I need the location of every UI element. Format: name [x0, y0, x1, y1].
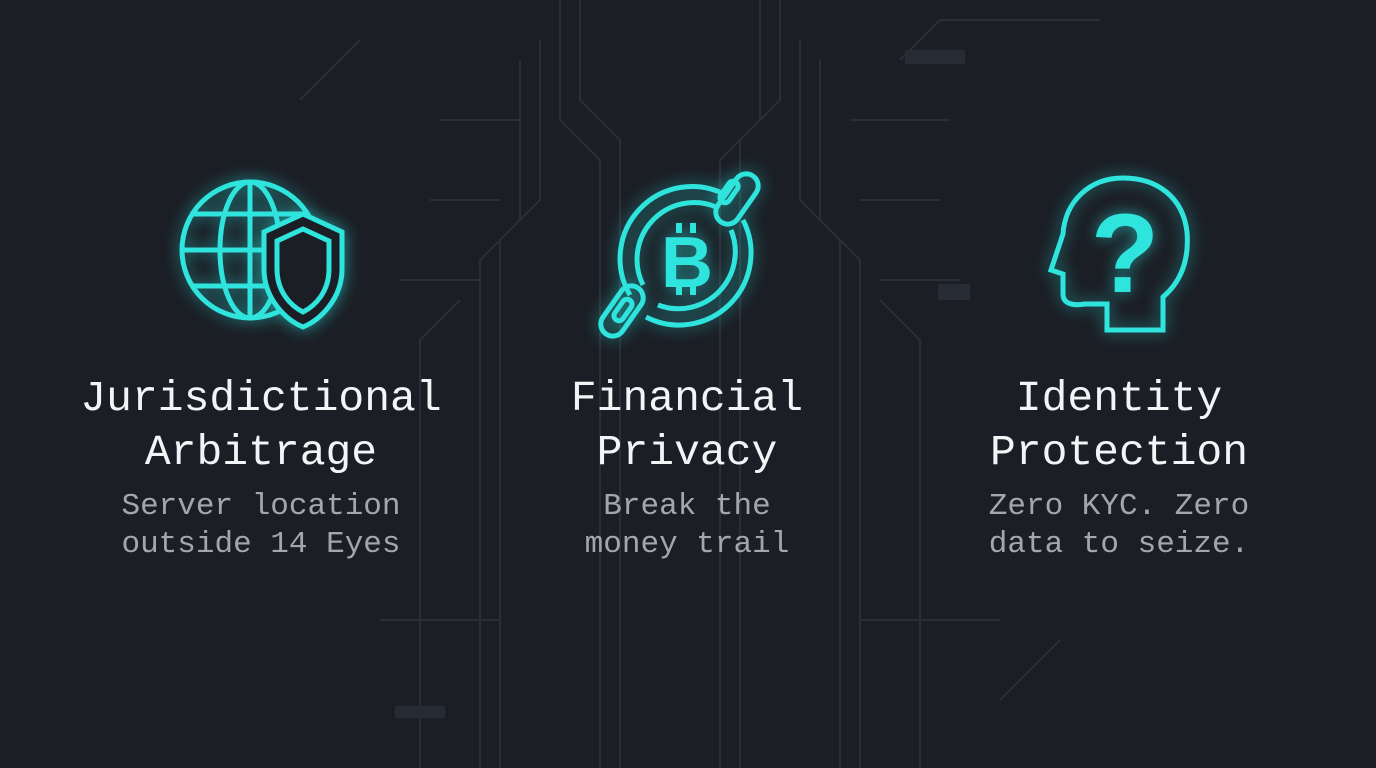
icon: bitcoin with broken chain [590, 163, 769, 347]
text block [989, 489, 1249, 562]
heading: Jurisdictional [80, 374, 442, 423]
heading: Arbitrage [145, 428, 377, 477]
column: identity protection [989, 374, 1249, 562]
heading: Protection [990, 428, 1248, 477]
heading [990, 374, 1248, 477]
text block: Break the [603, 489, 771, 524]
text block: money trail [585, 527, 789, 562]
icon: globe with shield [170, 169, 356, 338]
column: financial privacy [571, 374, 803, 562]
text block [121, 489, 401, 562]
text block: Server location [121, 489, 401, 524]
heading: Financial [571, 374, 803, 423]
icon: bitcoin with broken chain: B [661, 223, 713, 303]
icon: head with question mark: ? [1091, 191, 1159, 316]
heading: Identity [1016, 374, 1222, 423]
text block [585, 489, 789, 562]
text block: Zero KYC. Zero [989, 489, 1249, 524]
text block: data to seize. [989, 527, 1249, 562]
column: jurisdictional arbitrage [80, 374, 442, 562]
heading [80, 374, 442, 477]
heading: Privacy [597, 428, 777, 477]
heading [571, 374, 803, 477]
text block: outside 14 Eyes [121, 527, 401, 562]
icon: head with question mark [1041, 166, 1200, 342]
